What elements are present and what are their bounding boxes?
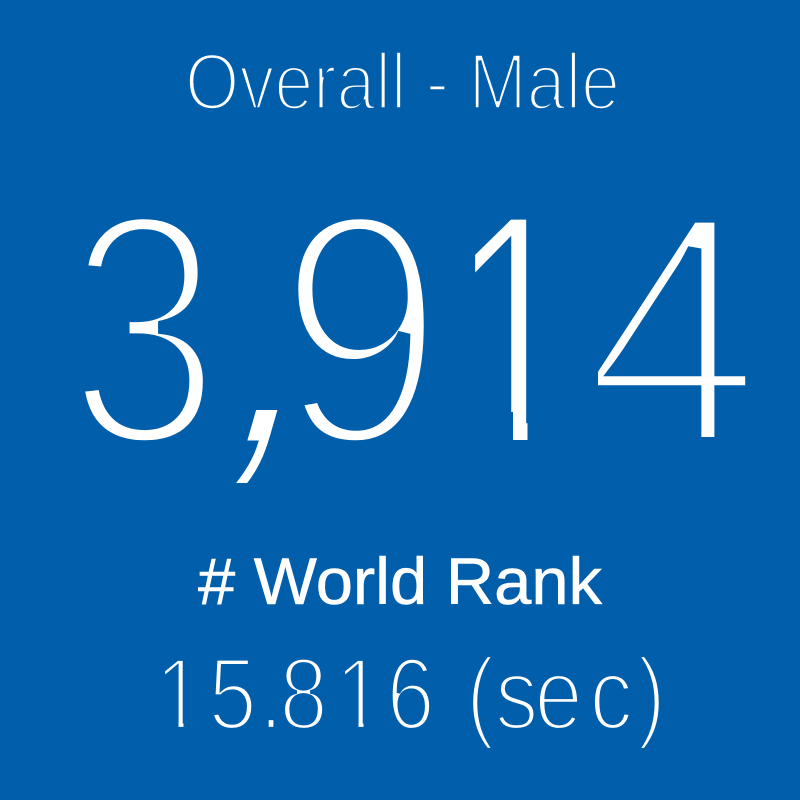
big number: world rank: 4 xyxy=(584,143,761,514)
big number: world rank: 3 xyxy=(68,143,221,515)
big number: world rank: 1 xyxy=(450,144,579,515)
big number: world rank xyxy=(68,143,761,515)
big number: world rank: , xyxy=(200,143,380,514)
title: Overall - Male xyxy=(185,37,620,126)
time value: 15.816 (sec) xyxy=(155,637,666,752)
label: world rank: # World Rank xyxy=(198,544,603,618)
big number: world rank: 9 xyxy=(278,143,444,514)
